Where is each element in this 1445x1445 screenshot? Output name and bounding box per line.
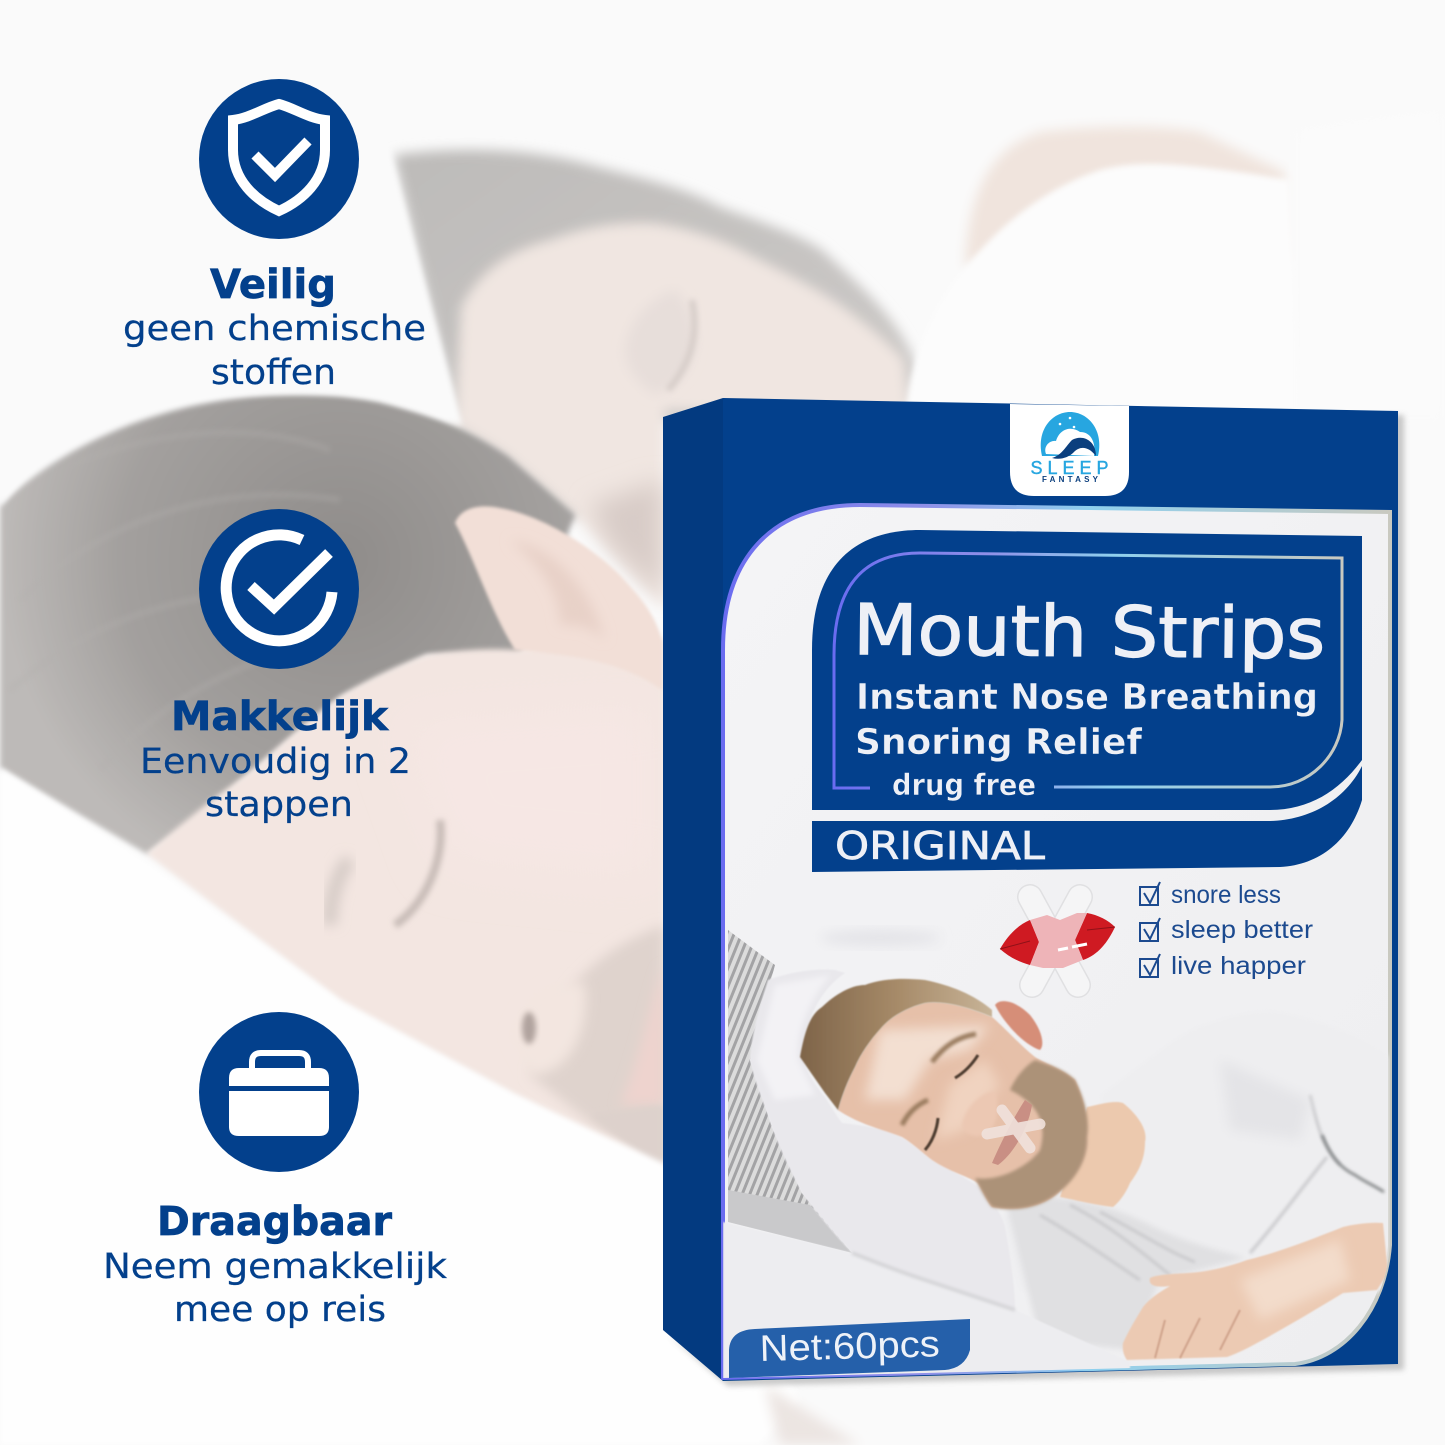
man's eyebrow bbox=[330, 860, 350, 925]
upper eye bbox=[955, 1055, 978, 1078]
wall smudge bbox=[834, 932, 925, 944]
lip line bbox=[1000, 927, 1115, 949]
X strip outline bbox=[1030, 897, 1080, 985]
white pillow bbox=[750, 969, 1015, 1310]
shadow near box bottom bbox=[765, 1385, 860, 1445]
logo text: FANTASY bbox=[1042, 475, 1099, 484]
hair bbox=[800, 979, 992, 1110]
woman's hair bbox=[394, 150, 917, 520]
text: Eenvoudig in 2 stappen: Eenvoudig in 2 bbox=[140, 742, 411, 782]
product box bbox=[663, 398, 1404, 1386]
thin title frame line bbox=[834, 553, 1342, 788]
woman's face bbox=[455, 223, 910, 610]
mouth strip diagram bbox=[1000, 897, 1115, 985]
face highlight bbox=[865, 1025, 990, 1100]
man's forehead pink bbox=[400, 700, 660, 880]
beard bbox=[975, 1060, 1088, 1209]
feature: Draagbaar bbox=[103, 1012, 448, 1330]
shirt bbox=[1376, 1054, 1390, 1295]
woman's cheek shade bbox=[590, 480, 662, 596]
text: Neem gemakkelijk mee op reis: mee op reis bbox=[174, 1290, 386, 1330]
heading: Makkelijk: Makkelijk bbox=[171, 694, 389, 740]
checkbox: live happer bbox=[1140, 954, 1160, 977]
text: Eenvoudig in 2 stappen bbox=[140, 742, 411, 825]
badge: Net 60pcs bbox=[729, 1319, 970, 1378]
checkbox: sleep better bbox=[1140, 918, 1160, 941]
hand highlight bbox=[1240, 1240, 1350, 1320]
logo tab bbox=[1010, 404, 1129, 496]
title: Mouth Strips: Mouth Strips bbox=[853, 589, 1326, 675]
item: snore less: snore less bbox=[1171, 881, 1281, 909]
patterned sheet bbox=[728, 1190, 852, 1253]
text: Neem gemakkelijk mee op reis: Neem gemakkelijk bbox=[103, 1247, 448, 1287]
finger gaps bbox=[1155, 1310, 1240, 1358]
lower brow bbox=[902, 1100, 928, 1125]
icon: shield with check bbox=[199, 79, 359, 239]
ear bbox=[995, 1001, 1042, 1050]
item: live happer: live happer bbox=[1171, 952, 1306, 980]
woman's closed eye bbox=[625, 290, 695, 395]
blue title panel bbox=[812, 530, 1362, 810]
pillow light side bbox=[761, 980, 820, 1096]
text: geen chemische stoffen bbox=[123, 309, 426, 393]
lower eye bbox=[925, 1118, 938, 1150]
shirt sleeve fold bbox=[1250, 1095, 1340, 1253]
heading: Veilig: Veilig bbox=[210, 262, 336, 308]
text: Neem gemakkelijk mee op reis bbox=[103, 1247, 448, 1330]
white front panel bbox=[723, 505, 1390, 1378]
item: sleep better: sleep better bbox=[1171, 916, 1313, 944]
feature: Veilig bbox=[123, 79, 426, 393]
checkbox: snore less bbox=[1140, 882, 1160, 905]
shirt armpit dark crease bbox=[1322, 1135, 1384, 1192]
arm and hand bbox=[1123, 1223, 1388, 1360]
lips right lobe bbox=[1075, 913, 1115, 960]
text: Eenvoudig in 2 stappen: stappen bbox=[205, 785, 353, 825]
subtitle: Snoring Relief: Snoring Relief bbox=[855, 722, 1142, 763]
foreground white pillow bbox=[0, 768, 800, 1445]
man's hair bbox=[0, 394, 575, 854]
text: drug free: drug free bbox=[892, 768, 1036, 802]
icon: briefcase bbox=[199, 1012, 359, 1172]
woman's arm bbox=[965, 127, 1285, 267]
man's eyelashes bbox=[395, 820, 441, 925]
badge: Net 60pcs: Net:60pcs bbox=[759, 1323, 940, 1369]
man's stubble bbox=[530, 925, 664, 1165]
heading: Draagbaar: Draagbaar bbox=[157, 1199, 392, 1245]
text: geen chemische stoffen: stoffen bbox=[211, 353, 336, 393]
bed sheet bbox=[723, 1222, 1130, 1385]
mouth strip bbox=[987, 1110, 1040, 1148]
man's chin bbox=[590, 1105, 664, 1172]
striped pillow bbox=[728, 930, 852, 1253]
man's lips bbox=[620, 965, 664, 1105]
logo mark: moon and cloud bbox=[1041, 412, 1099, 459]
icon: circular check bbox=[199, 509, 359, 669]
man's ear bbox=[455, 506, 662, 690]
sheet shadow bbox=[852, 1253, 1015, 1310]
text: geen chemische stoffen: geen chemische bbox=[123, 309, 426, 349]
right sheets bbox=[1295, 110, 1445, 420]
checklist bbox=[1140, 881, 1313, 980]
box shadow bbox=[668, 415, 1404, 1386]
box front face bbox=[723, 398, 1398, 1381]
man's hair strands bbox=[10, 433, 340, 770]
feature: Makkelijk bbox=[140, 509, 411, 825]
photo: man sleeping with mouth strip bbox=[723, 930, 1388, 1385]
chest shirt folds bbox=[1005, 1197, 1245, 1350]
woman's eye lash line bbox=[668, 300, 694, 390]
label: ORIGINAL: ORIGINAL bbox=[835, 824, 1045, 868]
strip dash bbox=[1058, 944, 1087, 950]
subtitle: Instant Nose Breathing: Instant Nose Breathing bbox=[856, 677, 1318, 718]
X strip bbox=[1030, 897, 1080, 985]
man's nostril bbox=[522, 1012, 536, 1044]
man's ear inner shade bbox=[510, 540, 605, 640]
face bbox=[838, 1002, 1087, 1209]
man's face bbox=[147, 640, 664, 1172]
white swoosh and ORIGINAL band bbox=[812, 766, 1362, 872]
nose bbox=[965, 1098, 996, 1134]
man's nose bbox=[510, 982, 586, 1075]
neck bbox=[1060, 1102, 1146, 1207]
upper left pillow bbox=[0, 0, 462, 505]
shirt centre shade bbox=[1228, 1073, 1301, 1132]
logo text: SLEEP bbox=[1030, 458, 1108, 478]
woman's shirt shoulder bbox=[905, 164, 1300, 410]
lips bbox=[992, 1100, 1032, 1165]
upper brow bbox=[932, 1034, 976, 1062]
lips under strip bbox=[1030, 913, 1087, 968]
lips left lobe bbox=[1000, 920, 1039, 965]
box side face bbox=[663, 398, 723, 1381]
cheek highlight bbox=[938, 1062, 999, 1138]
